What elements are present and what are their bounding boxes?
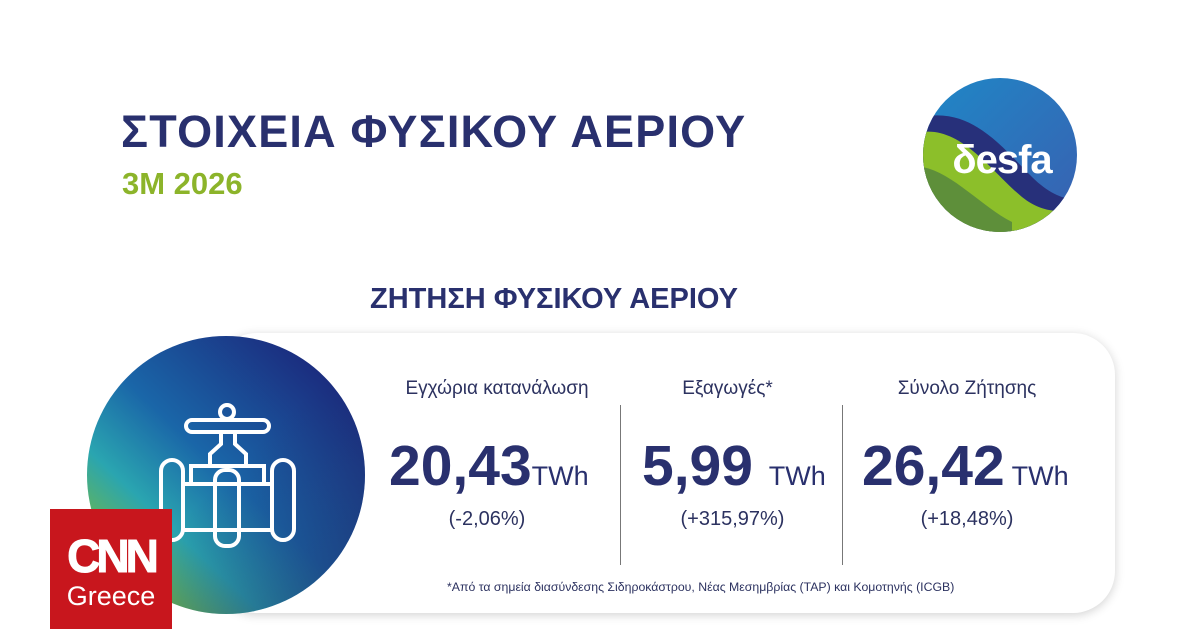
subtitle: period: 3M 2026 — [122, 166, 243, 201]
title: ΣΤΟΙΧΕΙΑ ΦΥΣΙΚΟΥ ΑΕΡΙΟΥ — [121, 106, 746, 157]
logo: CNN Greece: Greece — [67, 581, 155, 611]
label: domestic consumption: Εγχώρια κατανάλωση — [405, 378, 589, 399]
change: exports: (+315,97%) — [681, 508, 784, 530]
icon: gradient circle with valve — [87, 336, 365, 614]
label: total demand: Σύνολο Ζήτησης — [898, 378, 1036, 399]
section heading: ΖΗΤΗΣΗ ΦΥΣΙΚΟΥ ΑΕΡΙΟΥ — [370, 283, 738, 315]
change: total: (+18,48%) — [921, 508, 1013, 530]
change: domestic: (-2,06%) — [449, 508, 525, 530]
logo: desfa — [923, 78, 1077, 232]
logo: CNN Greece — [50, 509, 172, 629]
label: exports: Εξαγωγές* — [682, 378, 773, 399]
panel: demand card — [215, 333, 1115, 613]
value: domestic: 20,43TWh — [389, 434, 589, 498]
value: total: 26,42 TWh — [862, 434, 1069, 498]
logo: desfa: δesfa — [952, 138, 1053, 182]
value: exports: 5,99 TWh — [642, 434, 826, 498]
logo: CNN Greece: CNN — [67, 530, 155, 582]
footnote: *Από τα σημεία διασύνδεσης Σιδηροκάστρου, Νέας Μεσημβρίας (TAP) και Κομοτηνής (ICGB) — [447, 580, 954, 594]
